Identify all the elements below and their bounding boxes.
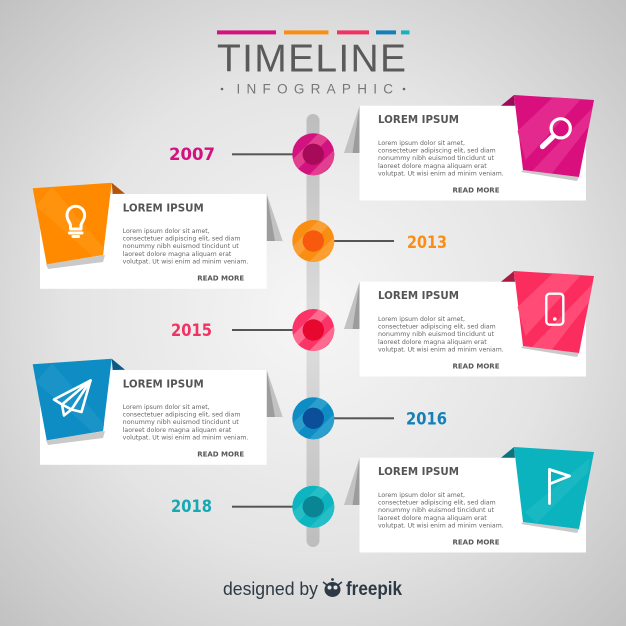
body text [123, 229, 249, 265]
heading: LOREM IPSUM [378, 466, 459, 478]
footer credit [223, 578, 402, 600]
year 2016: 2016 [406, 409, 447, 429]
body text: consectetuer adipiscing elit, sed diam [378, 149, 496, 155]
heading: LOREM IPSUM [378, 290, 459, 302]
body text: volutpat. Ut wisi enim ad minim veniam. [378, 523, 504, 529]
body text: Lorem ipsum dolor sit amet, [378, 317, 465, 323]
icon: light bulb [67, 206, 85, 236]
body text [378, 317, 504, 353]
ribbon [501, 95, 594, 181]
body text: laoreet dolore magna aliquam erat [123, 252, 232, 258]
icon: flag [550, 470, 570, 504]
icon: magnifier [542, 119, 570, 146]
node 2013 [292, 220, 334, 262]
body text: laoreet dolore magna aliquam erat [378, 340, 487, 346]
body text: laoreet dolore magna aliquam erat [378, 516, 487, 522]
year 2007: 2007 [169, 145, 215, 165]
body text: nonummy nibh euismod tincidunt ut [378, 156, 495, 162]
panel: 2015 card [344, 271, 594, 376]
body text: nonummy nibh euismod tincidunt ut [378, 508, 495, 514]
read more: READ MORE [452, 185, 500, 194]
body text: laoreet dolore magna aliquam erat [378, 164, 487, 170]
timeline spine [306, 114, 320, 547]
icon: paper plane [54, 380, 90, 416]
body text: consectetuer adipiscing elit, sed diam [123, 413, 241, 419]
body text: volutpat. Ut wisi enim ad minim veniam. [378, 171, 504, 177]
ribbon [501, 447, 594, 533]
connector 2015 [232, 329, 294, 331]
body text [378, 493, 504, 529]
icon: phone [546, 294, 563, 325]
year 2018: 2018 [171, 497, 212, 517]
body text: consectetuer adipiscing elit, sed diam [123, 237, 241, 243]
heading: LOREM IPSUM [378, 114, 459, 126]
body text: consectetuer adipiscing elit, sed diam [378, 325, 496, 331]
connector 2016 [333, 417, 394, 419]
body text: Lorem ipsum dolor sit amet, [123, 405, 210, 411]
body text: Lorem ipsum dolor sit amet, [378, 141, 465, 147]
body text: nonummy nibh euismod tincidunt ut [123, 244, 239, 250]
body text: nonummy nibh euismod tincidunt ut [123, 420, 239, 426]
body text: Lorem ipsum dolor sit amet, [378, 493, 465, 499]
subtitle: INFOGRAPHIC [236, 81, 393, 96]
title: TIMELINE [217, 38, 406, 81]
body text: laoreet dolore magna aliquam erat [123, 428, 232, 434]
body text [378, 141, 504, 177]
node 2016 [292, 397, 334, 440]
body text: volutpat. Ut wisi enim ad minim veniam. [123, 435, 249, 441]
title accent bars [217, 30, 410, 34]
connector 2018 [232, 506, 294, 508]
panel: 2007 card [344, 95, 594, 200]
connector 2007 [232, 153, 294, 155]
ribbon [33, 183, 125, 269]
read more: READ MORE [452, 361, 500, 370]
node 2018 [292, 486, 334, 528]
read more: READ MORE [197, 449, 244, 458]
node 2007 [292, 133, 334, 176]
node 2015 [292, 309, 334, 351]
heading: LOREM IPSUM [123, 202, 204, 214]
ribbon [33, 359, 125, 445]
body text [123, 405, 249, 441]
body text: nonummy nibh euismod tincidunt ut [378, 332, 495, 338]
panel: 2018 card [344, 447, 594, 552]
body text: Lorem ipsum dolor sit amet, [123, 229, 210, 235]
read more: READ MORE [452, 537, 500, 546]
heading: LOREM IPSUM [123, 378, 204, 390]
ribbon [501, 271, 594, 357]
panel: 2013 card [33, 183, 283, 289]
footer credit: freepik [346, 579, 402, 600]
body text: volutpat. Ut wisi enim ad minim veniam. [378, 347, 504, 353]
body text: consectetuer adipiscing elit, sed diam [378, 501, 496, 507]
icon: freepik mascot [323, 578, 342, 597]
year 2015: 2015 [171, 321, 212, 341]
body text: volutpat. Ut wisi enim ad minim veniam. [123, 259, 249, 265]
footer credit: designed by [223, 578, 319, 599]
year 2013: 2013 [407, 233, 447, 253]
panel: 2016 card [33, 359, 283, 465]
read more: READ MORE [197, 273, 244, 282]
connector 2013 [333, 240, 394, 242]
